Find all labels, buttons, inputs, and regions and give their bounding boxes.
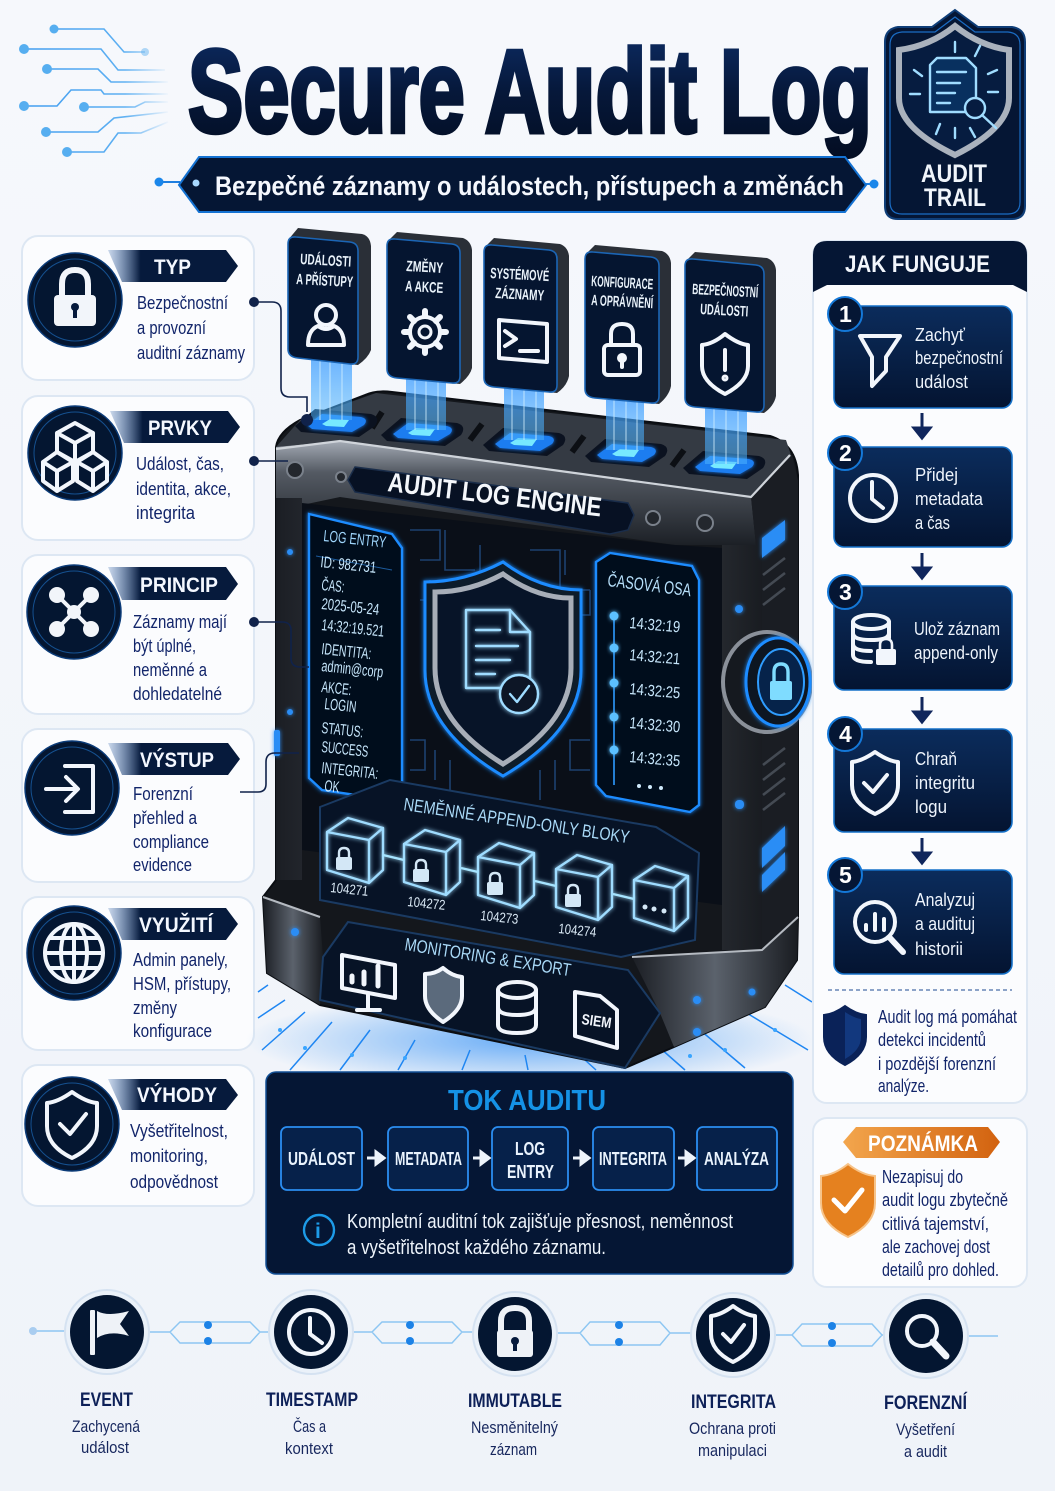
step 5: historii xyxy=(915,939,963,959)
icon: chart magnifier xyxy=(855,902,903,952)
panel: typ: a provozní xyxy=(137,318,206,338)
icon: document check xyxy=(466,610,538,713)
panel: log entry: ID: 982731 xyxy=(320,554,377,577)
flow step: metadata: METADATA xyxy=(395,1149,462,1169)
panel: casova osa: 14:32:25 xyxy=(629,681,681,702)
bottom item: integrita: Ochrana proti xyxy=(689,1419,776,1438)
panel: prvky: Událost, čas, xyxy=(136,454,224,474)
step 4 xyxy=(828,717,1012,832)
step 1: bezpečnostní xyxy=(915,348,1003,368)
icon: network node xyxy=(27,565,121,659)
panel: append-only blocks xyxy=(320,780,699,957)
panel: casova osa: ČASOVÁ OSA xyxy=(607,569,692,600)
bottom item: immutable: Nesměnitelný xyxy=(471,1418,558,1437)
icon: siem document xyxy=(575,992,617,1048)
circuit pattern xyxy=(410,530,590,800)
card: udalosti a pristupy xyxy=(288,228,371,365)
block 3 xyxy=(478,843,534,908)
panel: poznamka: Nezapisuj do xyxy=(882,1167,963,1187)
panel: casova osa xyxy=(596,553,699,812)
icon: user xyxy=(308,305,344,345)
panel: vystup: Forenzní xyxy=(133,784,193,804)
panel: typ: Bezpečnostní xyxy=(137,293,228,313)
step 3: Ulož záznam xyxy=(914,619,1000,639)
panel: tok auditu xyxy=(266,1072,793,1274)
step 4: 4 xyxy=(839,721,852,747)
socket 4 xyxy=(585,439,667,467)
icon: clock xyxy=(850,475,896,521)
step 3: append-only xyxy=(914,643,998,663)
icon: magnifier xyxy=(907,1316,946,1356)
icon: shield alert xyxy=(702,334,748,394)
flow step: analyza xyxy=(697,1127,777,1190)
panel: princip: neměnné a xyxy=(133,660,208,680)
step 4: Chraň xyxy=(915,749,957,769)
top slab xyxy=(276,393,792,497)
card: systemove zaznamy: ZÁZNAMY xyxy=(495,285,545,305)
bottom item: integrita: INTEGRITA xyxy=(691,1392,776,1413)
note: i pozdější forenzní xyxy=(878,1054,996,1074)
icon: info xyxy=(304,1215,334,1245)
connector lines from left cards to engine xyxy=(240,297,313,792)
base bumper right xyxy=(632,917,798,1047)
card: zmeny a akce: A AKCE xyxy=(405,278,444,297)
step 2: metadata xyxy=(915,489,984,509)
bottom item: event xyxy=(65,1290,149,1457)
panel: princip: PRINCIP xyxy=(140,574,218,597)
right side face xyxy=(751,455,798,950)
header circuit traces xyxy=(19,24,168,157)
audit log engine label plate: AUDIT LOG ENGINE xyxy=(386,467,603,522)
icon: database lock xyxy=(853,615,896,665)
icon: lock xyxy=(497,1308,533,1357)
flow step: metadata xyxy=(388,1127,468,1190)
card: bezpecnostni udalosti xyxy=(685,252,776,413)
icon: globe xyxy=(27,906,121,1000)
card: konfigurace a opravneni: A OPRÁVNĚNÍ xyxy=(591,291,654,312)
panel: poznamka: detailů pro dohled. xyxy=(882,1260,999,1280)
bottom item: event: EVENT xyxy=(80,1390,133,1411)
icon: terminal xyxy=(499,320,547,362)
icon: lock xyxy=(604,324,640,375)
panel: vyuziti: Admin panely, xyxy=(133,950,228,970)
panel: princip: dohledatelné xyxy=(133,684,222,704)
panel: vystup xyxy=(22,729,254,882)
note xyxy=(824,1006,1017,1096)
block connectors xyxy=(383,855,634,899)
card: udalosti a pristupy: A PŘÍSTUPY xyxy=(296,270,354,291)
panel: typ: TYP xyxy=(154,256,191,279)
engine body xyxy=(263,391,798,1068)
panel: princip xyxy=(22,555,254,714)
central shield xyxy=(425,562,581,776)
panel: vyuziti: konfigurace xyxy=(133,1021,212,1041)
panel: prvky: PRVKY xyxy=(148,417,212,440)
bottom item: integrita: manipulaci xyxy=(698,1441,767,1460)
card: konfigurace a opravneni: KONFIGURACE xyxy=(591,273,654,293)
panel: vyhody: Vyšetřitelnost, xyxy=(130,1121,228,1141)
card: zmeny a akce xyxy=(387,232,472,384)
edge highlights xyxy=(276,441,790,497)
bottom connectors xyxy=(29,1321,998,1347)
card: systemove zaznamy xyxy=(484,238,569,393)
panel: log entry: SUCCESS xyxy=(321,739,369,761)
step 2: Přidej xyxy=(915,465,958,485)
block ids: 104271 xyxy=(330,879,369,899)
icon: monitor chart xyxy=(342,955,395,1010)
panel: casova osa: 14:32:21 xyxy=(629,647,681,668)
bottom item: timestamp: Čas a xyxy=(293,1417,326,1436)
panel: log entry xyxy=(309,514,402,800)
bottom item: event: událost xyxy=(81,1438,129,1457)
step 4: integritu xyxy=(915,773,975,793)
panel: log entry: INTEGRITA: xyxy=(321,760,379,783)
card: systemove zaznamy: SYSTÉMOVÉ xyxy=(490,265,550,285)
bottom item: timestamp: TIMESTAMP xyxy=(266,1390,358,1411)
step 1: událost xyxy=(915,372,968,392)
step 5: Analyzuj xyxy=(915,890,975,910)
step 4: logu xyxy=(915,797,947,817)
icon: shield check xyxy=(852,752,898,814)
panel: tok auditu: TOK AUDITU xyxy=(448,1085,606,1117)
panel: log entry: LOGIN xyxy=(324,696,357,716)
card: udalosti a pristupy: UDÁLOSTI xyxy=(300,251,352,271)
icon: export arrow xyxy=(25,741,119,835)
side lights xyxy=(274,520,785,892)
panel: vyuziti: HSM, přístupy, xyxy=(133,974,231,994)
arrow xyxy=(914,838,930,863)
panel: princip: být úplné, xyxy=(133,636,196,656)
panel: poznamka xyxy=(813,1118,1027,1287)
block ids: 104272 xyxy=(407,893,446,913)
panel: vyhody: VÝHODY xyxy=(137,1083,217,1107)
panel: jak funguje xyxy=(813,241,1027,1103)
panel: casova osa: 14:32:35 xyxy=(629,749,681,770)
base bumper left xyxy=(263,897,323,1005)
side vents xyxy=(763,558,785,810)
icon: padlock xyxy=(28,253,122,347)
panel: vystup: VÝSTUP xyxy=(140,748,214,772)
icon: siem document: SIEM xyxy=(580,1011,613,1032)
bottom item: timestamp: kontext xyxy=(285,1439,333,1458)
bottom item: forenzni xyxy=(884,1294,968,1461)
icon: shield check xyxy=(25,1077,119,1171)
panel: poznamka: POZNÁMKA xyxy=(868,1131,978,1156)
flow step: udalost: UDÁLOST xyxy=(288,1148,355,1169)
bottom item: forenzni: FORENZNÍ xyxy=(884,1392,968,1414)
icon: gear xyxy=(404,311,446,353)
panel: log entry: OK xyxy=(324,778,340,797)
icon: info: i xyxy=(315,1220,321,1243)
icon: shield xyxy=(425,968,462,1022)
arrow xyxy=(914,697,930,722)
bottom item: event: Zachycená xyxy=(72,1417,140,1436)
flow step: analyza: ANALÝZA xyxy=(704,1148,769,1169)
bottom item: immutable: IMMUTABLE xyxy=(468,1391,562,1412)
step 3 xyxy=(828,575,1012,690)
panel: monitoring and export: MONITORING & EXPORT xyxy=(403,934,572,980)
front steel band xyxy=(276,441,756,545)
icon: three cubes xyxy=(28,406,122,500)
panel: poznamka: citlivá tajemství, xyxy=(882,1214,989,1234)
sockets and beams xyxy=(295,358,765,479)
panel: tok auditu: Kompletní auditní tok zajišťuje přesnost, neměnnost xyxy=(347,1211,733,1233)
step 2: 2 xyxy=(839,440,852,466)
panel: vyuziti: VYUŽITÍ xyxy=(139,913,214,937)
panel: typ xyxy=(22,236,254,380)
panel: casova osa: 14:32:30 xyxy=(629,715,681,736)
panel: vyuziti xyxy=(22,897,254,1050)
step 1 xyxy=(828,297,1012,408)
icon: funnel xyxy=(860,336,900,386)
panel: prvky xyxy=(22,396,254,540)
panel: poznamka: ale zachovej dost xyxy=(882,1237,990,1257)
step 1: 1 xyxy=(839,301,852,327)
step 5: a audituj xyxy=(915,914,975,934)
panel: log entry: 14:32:19.521 xyxy=(321,617,385,641)
socket 3 xyxy=(483,428,565,456)
flow step: log entry xyxy=(492,1127,568,1190)
flow step: udalost xyxy=(281,1127,362,1190)
arrow xyxy=(914,413,930,438)
icon: shield with document and magnifier xyxy=(899,26,1009,155)
light beams xyxy=(311,358,747,464)
subtitle banner: Bezpečné záznamy o událostech, přístupech a změnách xyxy=(215,171,844,201)
panel: prvky: integrita xyxy=(136,503,196,523)
main dark face xyxy=(302,503,722,905)
top slab grooves xyxy=(372,412,684,466)
step 3: 3 xyxy=(839,579,852,605)
card: konfigurace a opravneni xyxy=(585,245,671,404)
socket 5 xyxy=(683,451,765,479)
panel: vystup: compliance xyxy=(133,832,209,852)
icon: shield check xyxy=(711,1306,755,1362)
icon: database xyxy=(498,982,536,1033)
bottom item: timestamp xyxy=(266,1290,358,1458)
block ids xyxy=(330,879,597,940)
block ids: 104273 xyxy=(480,907,519,927)
panel: tok auditu: a vyšetřitelnost každého záznamu. xyxy=(347,1237,606,1259)
panel: vystup: evidence xyxy=(133,855,192,875)
panel: jak funguje: JAK FUNGUJE xyxy=(845,251,990,278)
floor glow lines under engine xyxy=(245,985,815,1088)
bottom item: forenzni: a audit xyxy=(904,1442,947,1461)
icon: clock xyxy=(289,1310,333,1354)
arrow xyxy=(914,553,930,578)
block 5 xyxy=(634,866,688,931)
bolts xyxy=(287,462,713,531)
icon: orange shield xyxy=(821,1164,875,1237)
flow step: log entry: LOG xyxy=(515,1139,545,1159)
badge: audit trail: AUDIT xyxy=(921,160,987,188)
panel: poznamka: audit logu zbytečně xyxy=(882,1190,1008,1210)
socket 1 xyxy=(295,409,377,437)
panel: casova osa: 14:32:19 xyxy=(629,615,681,636)
step 2 xyxy=(828,436,1012,547)
panel: princip: Záznamy mají xyxy=(133,612,227,632)
panel: vyhody: monitoring, xyxy=(130,1146,208,1166)
flow step: integrita xyxy=(593,1127,674,1190)
panel: prvky: identita, akce, xyxy=(136,479,231,499)
bottom item: immutable xyxy=(468,1292,562,1459)
panel: log entry: STATUS: xyxy=(321,720,364,741)
panel: vyhody xyxy=(22,1065,254,1206)
panel: vyuziti: změny xyxy=(133,998,177,1018)
note: analýze. xyxy=(878,1076,929,1096)
note: detekci incidentů xyxy=(878,1030,986,1050)
bottom item: immutable: záznam xyxy=(490,1440,537,1459)
icon: navy shield xyxy=(824,1006,866,1065)
bottom item: forenzni: Vyšetření xyxy=(896,1420,955,1439)
step 5 xyxy=(828,858,1012,974)
step 5: 5 xyxy=(839,862,852,888)
block 1 xyxy=(327,818,383,883)
panel: vystup: přehled a xyxy=(133,808,198,828)
panel: log entry: LOG ENTRY xyxy=(323,528,387,552)
engine xyxy=(263,391,811,1068)
socket 2 xyxy=(381,418,463,446)
panel: append-only blocks: NEMĚNNÉ APPEND-ONLY BLOKY xyxy=(402,794,631,847)
panel: typ: auditní záznamy xyxy=(137,343,245,363)
block 2 xyxy=(404,830,460,895)
card: bezpecnostni udalosti: BEZPEČNOSTNÍ xyxy=(692,280,759,301)
panel: vyhody: odpovědnost xyxy=(130,1172,218,1192)
note: Audit log má pomáhat xyxy=(878,1007,1017,1027)
panel: log entry: ČAS: xyxy=(321,575,345,596)
block ids: 104274 xyxy=(558,920,597,940)
icon: flag xyxy=(90,1310,129,1355)
card: zmeny a akce: ZMĚNY xyxy=(406,257,444,277)
badge: audit trail xyxy=(885,10,1025,219)
panel: log entry: AKCE: xyxy=(321,679,352,699)
step 1: Zachyť xyxy=(915,325,965,345)
side dial with lock xyxy=(723,632,811,732)
flow step: log entry: ENTRY xyxy=(507,1162,554,1182)
flow arrows xyxy=(367,1152,694,1164)
step 2: a čas xyxy=(915,513,950,533)
bottom item: integrita xyxy=(689,1293,776,1460)
panel: log entry: admin@corp xyxy=(321,658,384,681)
subtitle banner xyxy=(154,157,878,212)
card: bezpecnostni udalosti: UDÁLOSTI xyxy=(700,301,749,321)
side rails xyxy=(276,498,762,950)
panel: log entry: 2025-05-24 xyxy=(321,596,380,619)
panel: monitoring and export xyxy=(320,922,660,1068)
flow step: integrita: INTEGRITA xyxy=(599,1149,667,1169)
panel: log entry: IDENTITA: xyxy=(321,641,372,663)
block 4 xyxy=(556,855,612,920)
badge: audit trail: TRAIL xyxy=(924,184,986,212)
